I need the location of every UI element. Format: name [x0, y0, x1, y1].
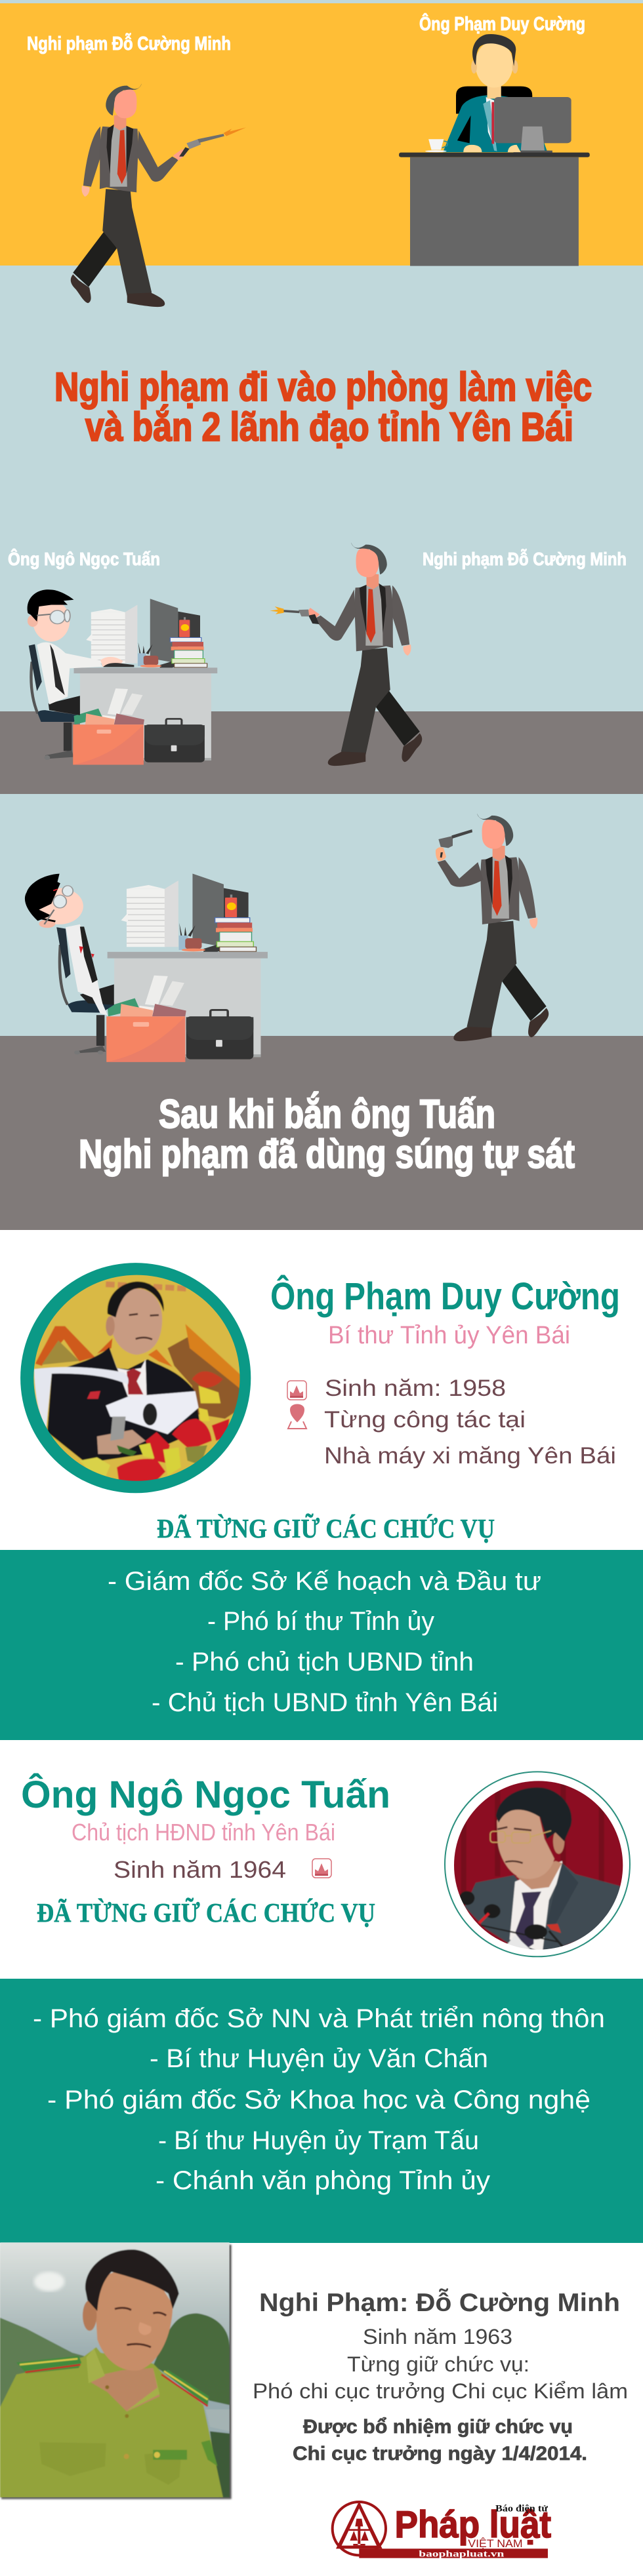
heading: Nghi Phạm Đỗ Cường Minh: Nghi Phạm: Đỗ Cường Minh: [259, 2288, 620, 2317]
text: Bí thư Tỉnh ủy Yên Bái: Bí thư Tỉnh ủy Yên Bái: [328, 1322, 570, 1349]
icon: location pin: [288, 1404, 306, 1429]
panel: positions of Phạm Duy Cường: - Chủ tịch UBND tỉnh Yên Bái: [152, 1688, 498, 1717]
icon: calendar: [287, 1381, 306, 1400]
panel: positions of Phạm Duy Cường: - Phó chủ tịch UBND tỉnh: [175, 1648, 474, 1676]
logo: Báo điện tử Pháp luật Việt Nam: [333, 2501, 551, 2559]
icon: raised arm holding revolver: [436, 829, 484, 887]
text: work location: Nhà máy xi măng Yên Bái: [324, 1443, 616, 1469]
text: Sinh năm 1958: Sinh năm: 1958: [325, 1376, 506, 1401]
panel: positions of Ngô Ngọc Tuấn: - Phó giám đốc Sở Khoa học và Công nghệ: [47, 2086, 591, 2114]
text: Chủ tịch HĐND tỉnh Yên Bái: Chủ tịch HĐND tỉnh Yên Bái: [72, 1819, 335, 1846]
icon: suspect firing toward Ngô Ngọc Tuấn: [306, 543, 422, 766]
icon: calendar: [312, 1859, 331, 1878]
illustration: Ngô Ngọc Tuấn slumped after being shot: [106, 874, 268, 1062]
logo: Báo điện tử Pháp luật Việt Nam: VIỆT NAM: [468, 2537, 523, 2550]
panel: positions of Phạm Duy Cường: - Giám đốc Sở Kế hoạch và Đầu tư: [108, 1567, 541, 1596]
icon: desk and official Phạm Duy Cường: [399, 34, 590, 266]
text: suspect biography: [253, 2325, 628, 2403]
text: Sinh năm 1964: Sinh năm 1964: [114, 1856, 286, 1883]
panel: positions of Ngô Ngọc Tuấn: - Phó giám đốc Sở NN và Phát triển nông thôn: [33, 2004, 605, 2033]
logo: Báo điện tử Pháp luật Việt Nam: Pháp luật: [395, 2504, 551, 2546]
heading: Ông Ngô Ngọc Tuấn: Ông Ngô Ngọc Tuấn: [21, 1773, 390, 1816]
panel: positions of Phạm Duy Cường: [0, 1550, 643, 1740]
photo: Ngô Ngọc Tuấn portrait: [445, 1772, 630, 1956]
photo: Đỗ Cường Minh in ranger uniform: [0, 2242, 232, 2499]
text: Sau khi bắn ông Tuấn: Sau khi bắn ông Tuấn: [159, 1092, 495, 1136]
text: appointment note: Được bổ nhiệm giữ chức vụ: [303, 2416, 573, 2438]
panel: positions of Ngô Ngọc Tuấn: - Bí thư Huyện ủy Văn Chấn: [150, 2044, 488, 2073]
text: work location: [324, 1407, 616, 1469]
text: work location: Từng công tác tại: [324, 1407, 526, 1433]
text: appointment note: [293, 2416, 587, 2465]
heading: former positions: ĐÃ TỪNG GIỮ CÁC CHỨC VỤ: [157, 1513, 495, 1543]
text: suspect biography: Từng giữ chức vụ:: [347, 2352, 529, 2376]
icon: victim figure on chair: [25, 874, 114, 1054]
illustration: Ngô Ngọc Tuấn working at office desk: [28, 589, 217, 764]
panel: positions of Phạm Duy Cường: - Phó bí thư Tỉnh ủy: [207, 1607, 434, 1636]
label: Nghi phạm Đỗ Cường Minh: Nghi phạm Đỗ Cường Minh: [27, 32, 231, 54]
icon: suspect pointing gun at own head: [453, 814, 549, 1041]
text: suspect biography: Phó chi cục trưởng Chi cục Kiểm lâm: [253, 2379, 628, 2403]
panel: positions of Ngô Ngọc Tuấn: [0, 1979, 643, 2243]
text: appointment note: Chi cục trưởng ngày 1/4/2014.: [293, 2443, 587, 2465]
text: suspect biography: Sinh năm 1963: [363, 2325, 512, 2348]
heading: former positions: ĐÃ TỪNG GIỮ CÁC CHỨC VỤ: [37, 1897, 375, 1928]
icon: suspect firing revolver toward the desk: [71, 84, 246, 307]
text: Sau khi bắn ông Tuấn: [79, 1092, 575, 1176]
panel: positions of Ngô Ngọc Tuấn: - Chánh văn phòng Tỉnh ủy: [156, 2166, 490, 2195]
panel: positions of Ngô Ngọc Tuấn: - Bí thư Huyện ủy Trạm Tấu: [158, 2126, 479, 2155]
heading: red headline: [54, 365, 592, 449]
label: Ông Phạm Duy Cường: Ông Phạm Duy Cường: [419, 12, 585, 35]
icon: revolver with muzzle flash: [270, 606, 319, 624]
photo: Phạm Duy Cường portrait: [20, 1263, 251, 1493]
logo: Báo điện tử Pháp luật Việt Nam: baophapluat.vn: [419, 2549, 505, 2559]
logo: Báo điện tử Pháp luật Việt Nam: Báo điện tử: [495, 2504, 548, 2514]
label: Ông Ngô Ngọc Tuấn: Ông Ngô Ngọc Tuấn: [8, 548, 160, 569]
